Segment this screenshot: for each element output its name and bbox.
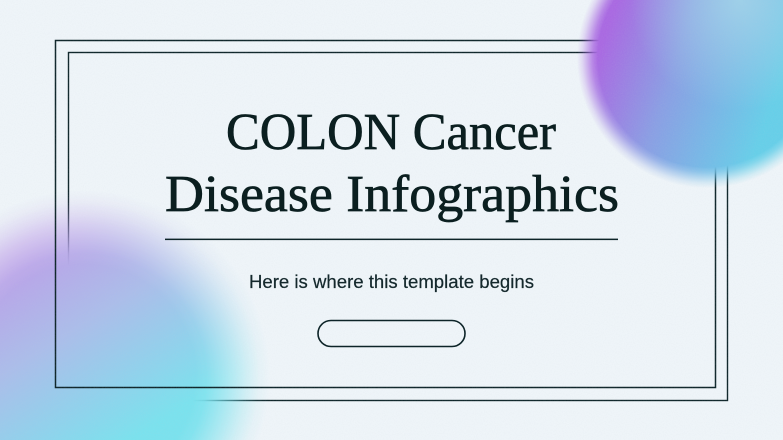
title xyxy=(165,104,619,223)
gradient blob: bottom left xyxy=(0,190,270,440)
title: COLON Cancer xyxy=(226,104,556,161)
divider line xyxy=(165,239,618,240)
button outline xyxy=(318,320,465,346)
title: Disease Infographics xyxy=(165,166,619,223)
outer frame xyxy=(56,40,716,388)
gradient blob: top right xyxy=(577,0,783,188)
inner frame xyxy=(68,52,728,400)
subtitle: Here is where this template begins xyxy=(249,272,534,292)
